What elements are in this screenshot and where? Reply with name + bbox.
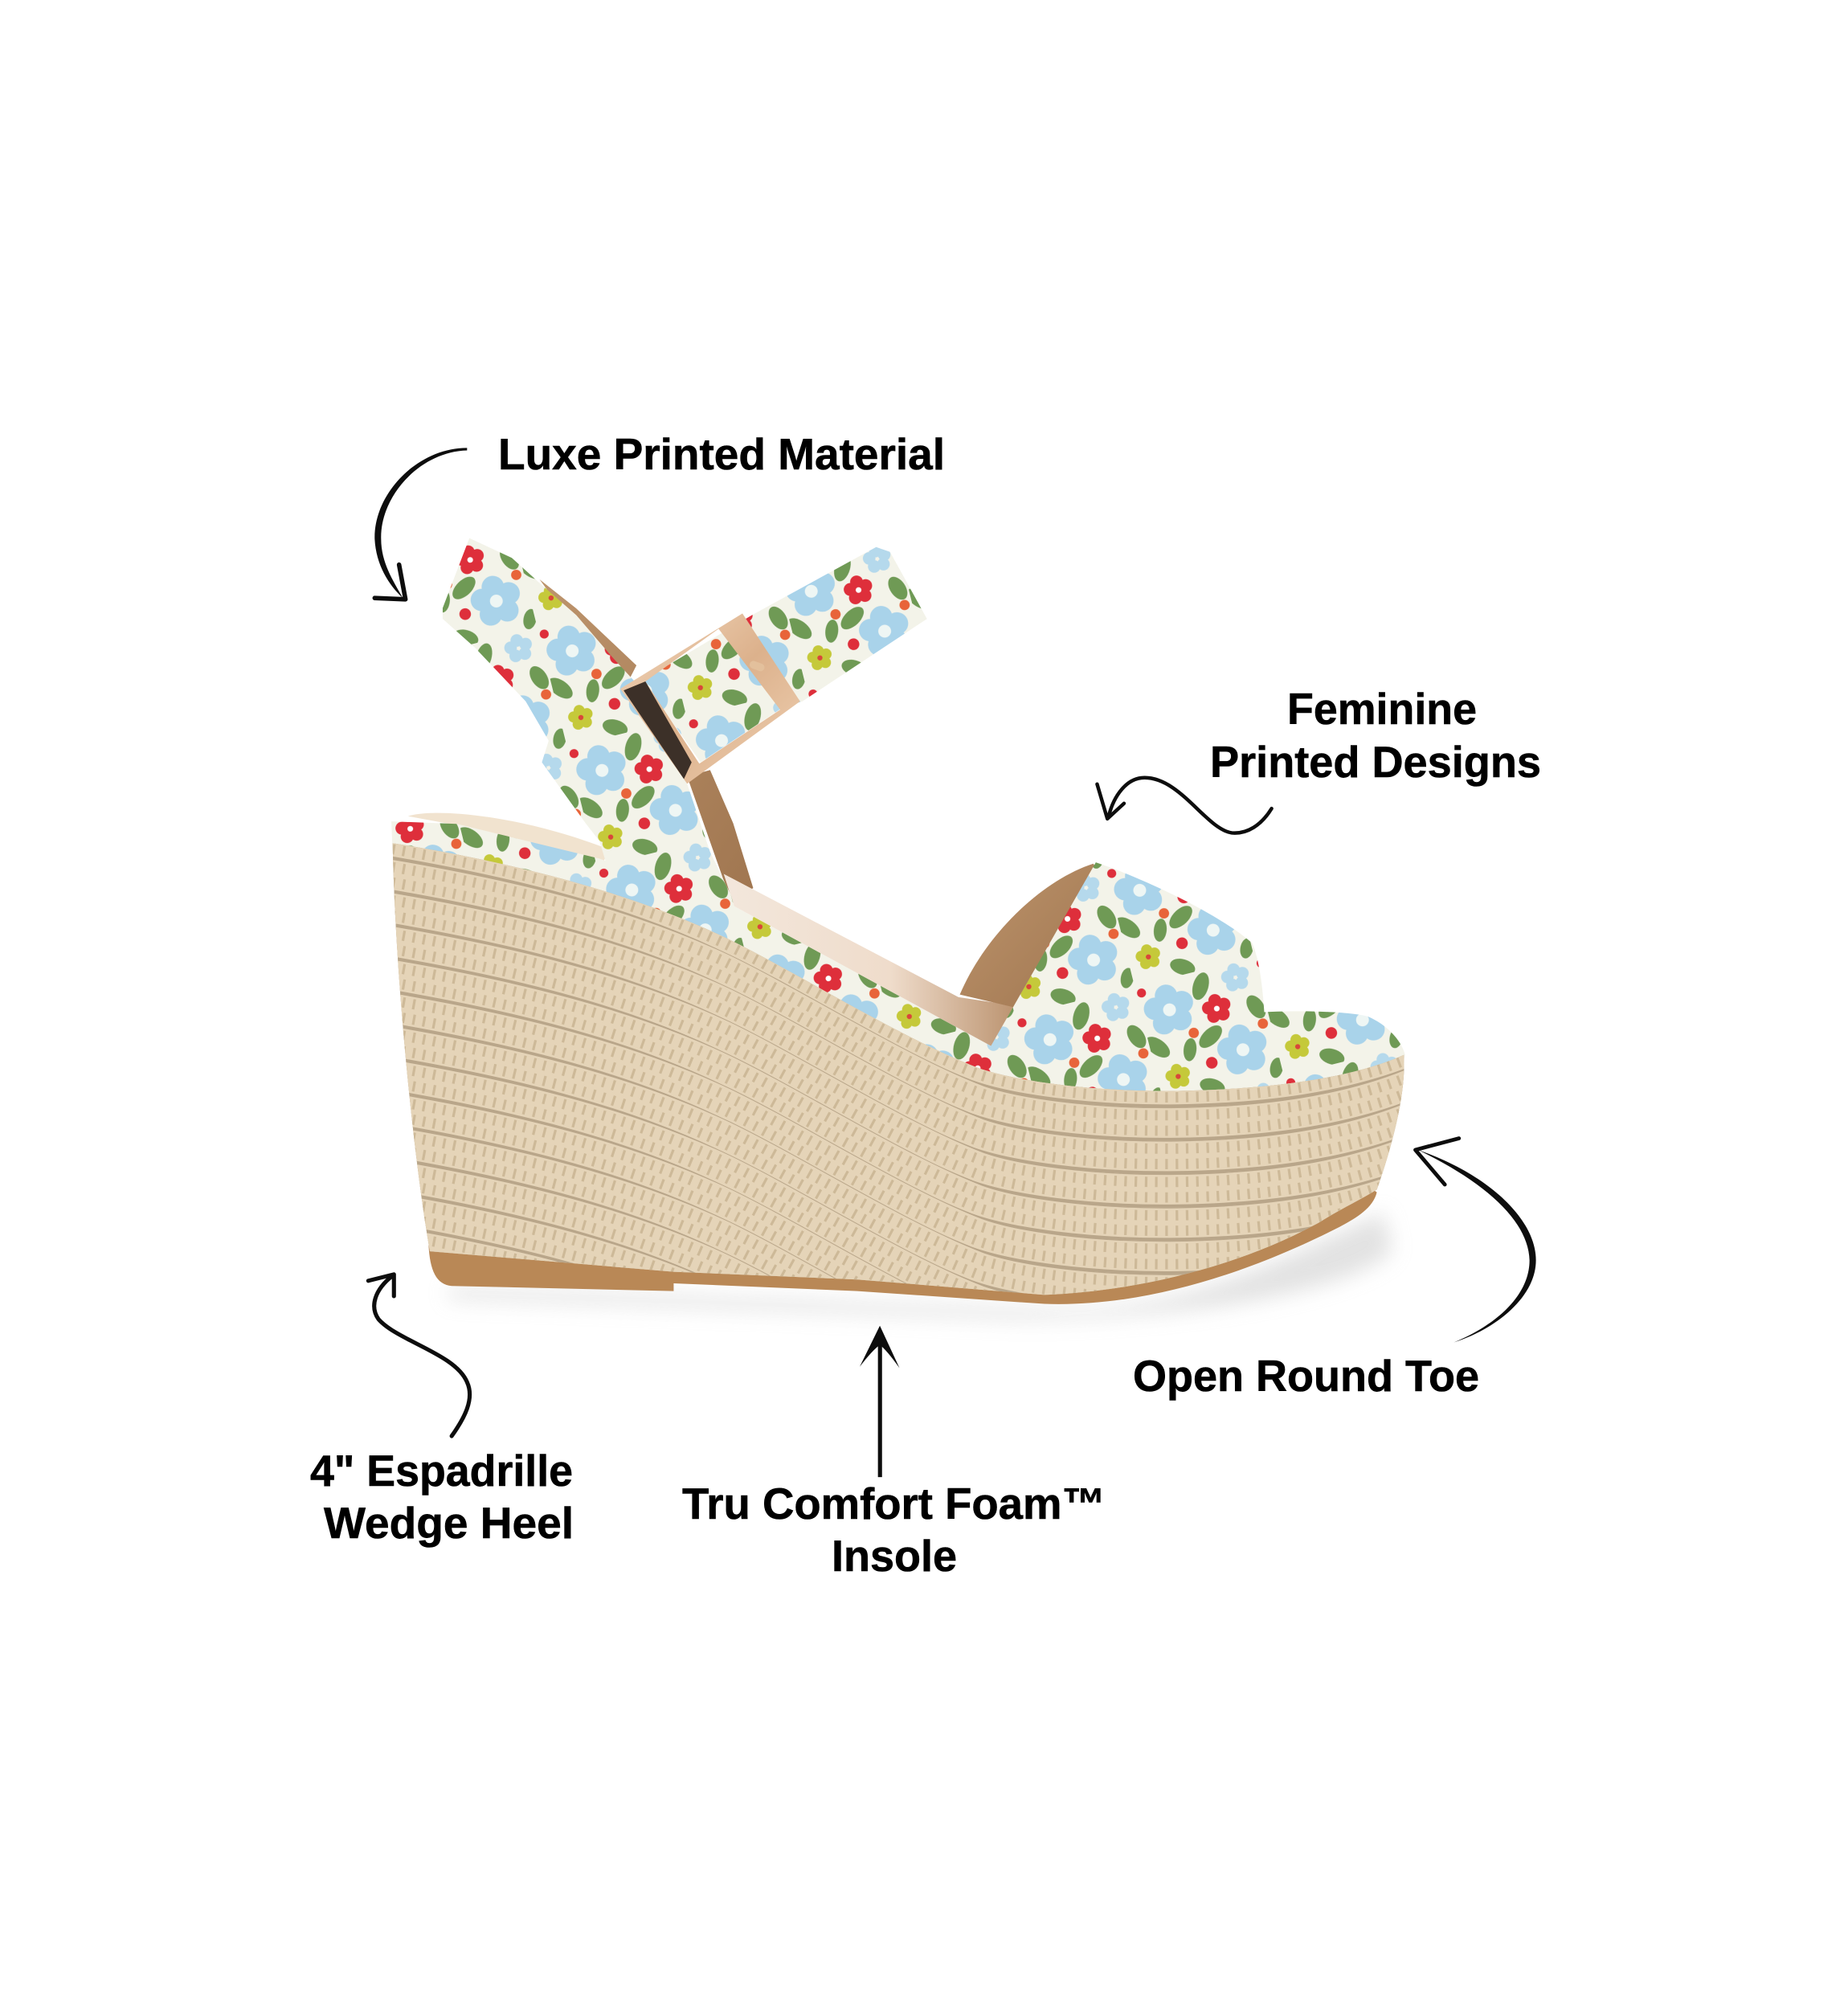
label: feminine printed designs: Printed Designs (1210, 737, 1541, 787)
label: feminine printed designs (1210, 684, 1541, 787)
label: espadrille wedge heel (310, 1446, 574, 1548)
product photo: floral espadrille wedge sandal (391, 538, 1405, 1324)
arrow: espadrille wedge heel (368, 1275, 470, 1436)
jute wedge (392, 843, 1404, 1295)
label: tru comfort foam insole (682, 1479, 1106, 1581)
floral heel and side binding (391, 821, 996, 1090)
back strap lining (540, 579, 753, 901)
vamp interior lining (960, 864, 1098, 1009)
arrow: feminine printed designs (1097, 778, 1272, 833)
floral ankle quarter strap (443, 538, 746, 944)
label: luxe printed material: Luxe Printed Material (498, 429, 945, 479)
floral buckle strap (643, 547, 927, 763)
heel insole (408, 813, 610, 862)
floral toe platform (1257, 1011, 1405, 1103)
mid insole (724, 874, 1027, 1049)
label: feminine printed designs: Feminine (1287, 684, 1477, 734)
arrow: tru comfort foam insole (860, 1326, 899, 1477)
floral vamp band (978, 862, 1266, 1103)
buckle (620, 613, 800, 784)
label: espadrille wedge heel: Wedge Heel (324, 1498, 574, 1548)
label: tru comfort foam insole: Insole (832, 1531, 957, 1581)
arrow: open round toe (1415, 1139, 1536, 1342)
label: tru comfort foam insole: Tru Comfort Foam™ (682, 1479, 1106, 1528)
label: espadrille wedge heel: 4" Espadrille (310, 1446, 573, 1495)
label: open round toe: Open Round Toe (1133, 1351, 1479, 1401)
sole shadow (449, 1213, 1392, 1320)
rubber outsole (428, 1180, 1377, 1304)
arrow: luxe printed material (374, 448, 467, 599)
